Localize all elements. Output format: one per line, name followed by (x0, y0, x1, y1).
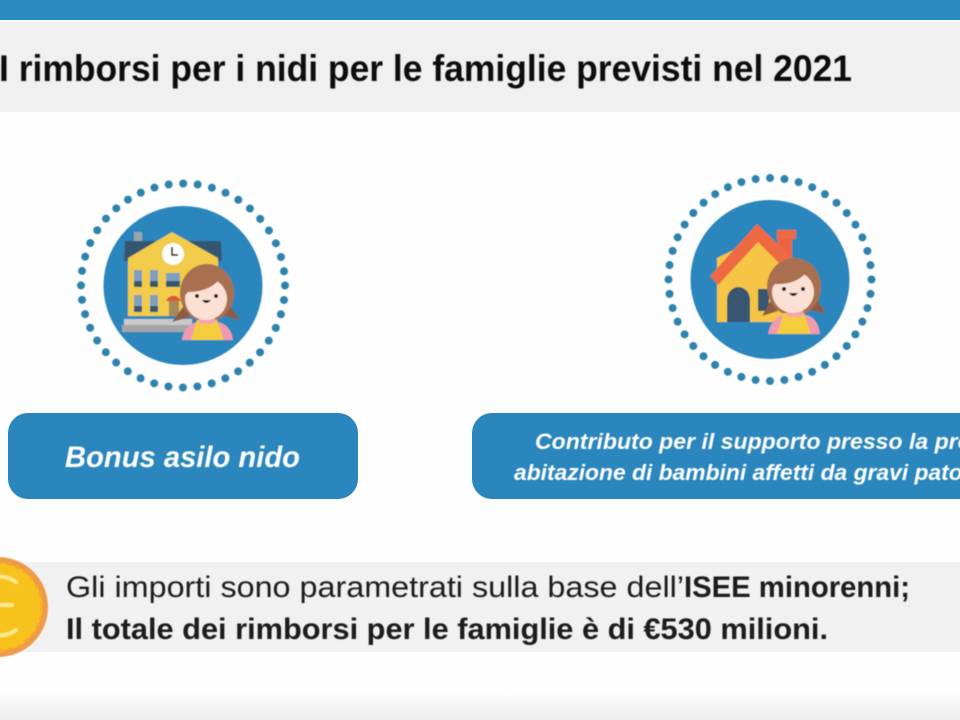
info text: Il totale dei rimborsi per le famiglie è di €530 milioni. (66, 613, 828, 646)
school building (122, 232, 222, 332)
info text: ISEE minorenni; (684, 571, 910, 604)
button: Contributo (472, 413, 960, 499)
button: Bonus asilo nido (8, 413, 358, 499)
child (172, 264, 240, 340)
icon: euro coin (0, 557, 48, 657)
bottom fade (0, 692, 960, 720)
child (762, 258, 826, 334)
info band (0, 557, 960, 657)
icon: school and child (81, 184, 285, 388)
house (710, 224, 797, 322)
icon: home and child (668, 178, 872, 381)
button label: Bonus asilo nido (65, 441, 300, 474)
info text (66, 571, 910, 646)
top blue bar (0, 0, 960, 20)
title: I rimborsi per i nidi per le famiglie previsti nel 2021 (0, 48, 852, 89)
header band (0, 22, 960, 112)
info text: Gli importi sono parametrati sulla base dell’ (66, 571, 684, 604)
